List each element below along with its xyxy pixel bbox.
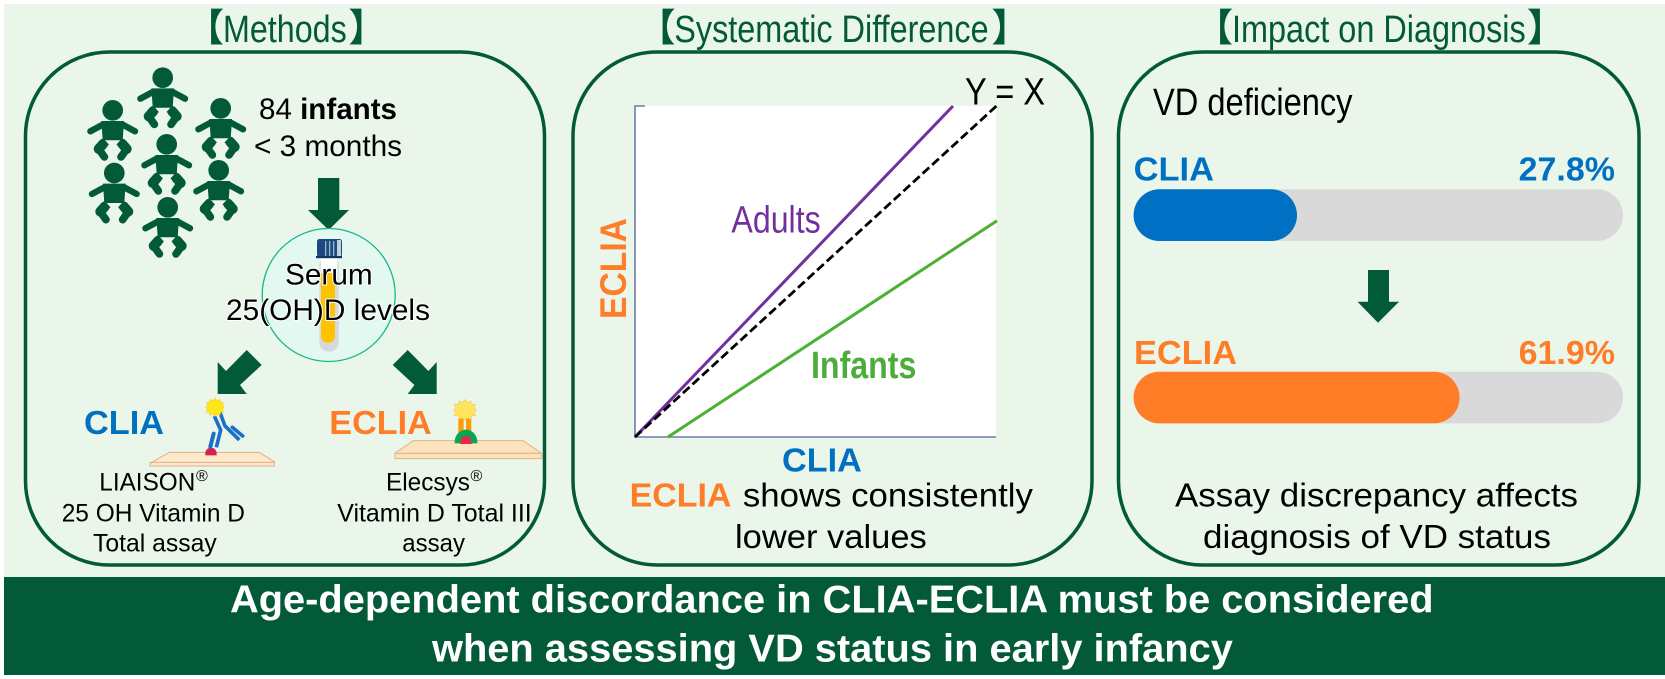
- text: LIAISON assay name: [62, 468, 245, 558]
- text: serum 25(OH)D levels: Serum: [285, 258, 373, 291]
- heading: methods: 】: [348, 8, 387, 50]
- heading: systematic difference: Systematic Difference: [674, 9, 989, 51]
- text: ECLIA shows consistently lower values: shows consistently: [743, 477, 1033, 514]
- axis label: ECLIA: ECLIA: [593, 218, 634, 319]
- text: ECLIA shows consistently lower values: lower values: [735, 518, 927, 555]
- bar: CLIA 27.8%: [1134, 189, 1623, 241]
- panel: methods: [26, 52, 544, 565]
- text: Elecsys assay name: ®: [470, 468, 482, 485]
- label: infants: Infants: [811, 345, 916, 387]
- text: 84 infants under 3 months: [254, 93, 402, 163]
- heading: methods: 【: [186, 8, 224, 50]
- heading: impact on diagnosis: 】: [1527, 8, 1565, 50]
- text: Elecsys assay name: Elecsys: [386, 469, 470, 497]
- text: 84 infants under 3 months: < 3 months: [254, 130, 402, 163]
- banner: conclusion: Age-dependent discordance in CLIA-ECLIA must be considered: [230, 579, 1434, 622]
- heading: impact on diagnosis: 【: [1195, 8, 1233, 50]
- text: assay discrepancy conclusion: Assay discrepancy affects: [1175, 477, 1578, 514]
- text: Elecsys assay name: Vitamin D Total III: [337, 500, 532, 528]
- label: ECLIA: ECLIA: [329, 405, 432, 442]
- arrow: to ECLIA: [393, 350, 437, 394]
- text: LIAISON assay name: Total assay: [93, 530, 217, 558]
- banner: conclusion: [4, 577, 1665, 675]
- label: CLIA: CLIA: [84, 405, 164, 442]
- text: serum 25(OH)D levels: 25(OH)D levels: [226, 294, 430, 327]
- axis label: CLIA: CLIA: [782, 443, 862, 480]
- heading: systematic difference: 【: [638, 8, 676, 50]
- label: CLIA: CLIA: [1134, 152, 1214, 189]
- arrow: down to serum: [308, 178, 349, 230]
- text: Elecsys assay name: assay: [402, 530, 465, 558]
- text: 84 infants under 3 months: 84 infants: [259, 93, 397, 126]
- label: ECLIA: ECLIA: [1134, 335, 1237, 372]
- text: ECLIA shows consistently lower values: ECLIA: [630, 478, 731, 515]
- icon: test tube: [316, 239, 342, 352]
- text: LIAISON assay name: LIAISON: [99, 469, 195, 497]
- icon: serum circle: [262, 228, 395, 362]
- heading: methods: Methods: [223, 9, 347, 51]
- text: LIAISON assay name: 25 OH Vitamin D: [62, 500, 245, 528]
- line: Y = X: [635, 106, 996, 437]
- text: assay discrepancy conclusion: diagnosis of VD status: [1203, 518, 1551, 555]
- text: serum 25(OH)D levels: [226, 258, 430, 327]
- label: adults: Adults: [731, 199, 821, 241]
- arrow: down: [1358, 270, 1399, 323]
- text: ECLIA shows consistently lower values: [630, 477, 1033, 555]
- value: 27.8%: 27.8%: [1519, 152, 1615, 189]
- heading: systematic difference: 】: [992, 8, 1030, 50]
- text: Elecsys assay name: [337, 468, 532, 558]
- value: 61.9%: 61.9%: [1519, 335, 1615, 372]
- text: LIAISON assay name: ®: [196, 468, 208, 485]
- icon: CLIA antibody on plate: [150, 398, 274, 466]
- arrow: to CLIA: [218, 350, 262, 394]
- icon: infants: [90, 67, 243, 254]
- panel: systematic difference: [573, 52, 1092, 565]
- text: VD deficiency: VD deficiency: [1153, 82, 1352, 124]
- label: Y = X: Y = X: [965, 71, 1045, 113]
- bar: ECLIA 61.9%: [1134, 372, 1623, 423]
- text: assay discrepancy conclusion: [1175, 477, 1578, 555]
- chart: ECLIA vs CLIA lines: [635, 106, 997, 437]
- banner: conclusion: when assessing VD status in early infancy: [431, 628, 1233, 671]
- line: infants: [668, 221, 997, 437]
- panel: impact on diagnosis: [1118, 52, 1639, 565]
- heading: impact on diagnosis: Impact on Diagnosis: [1232, 9, 1526, 51]
- line: adults: [635, 106, 953, 437]
- icon: ECLIA antibody on plate: [395, 399, 542, 459]
